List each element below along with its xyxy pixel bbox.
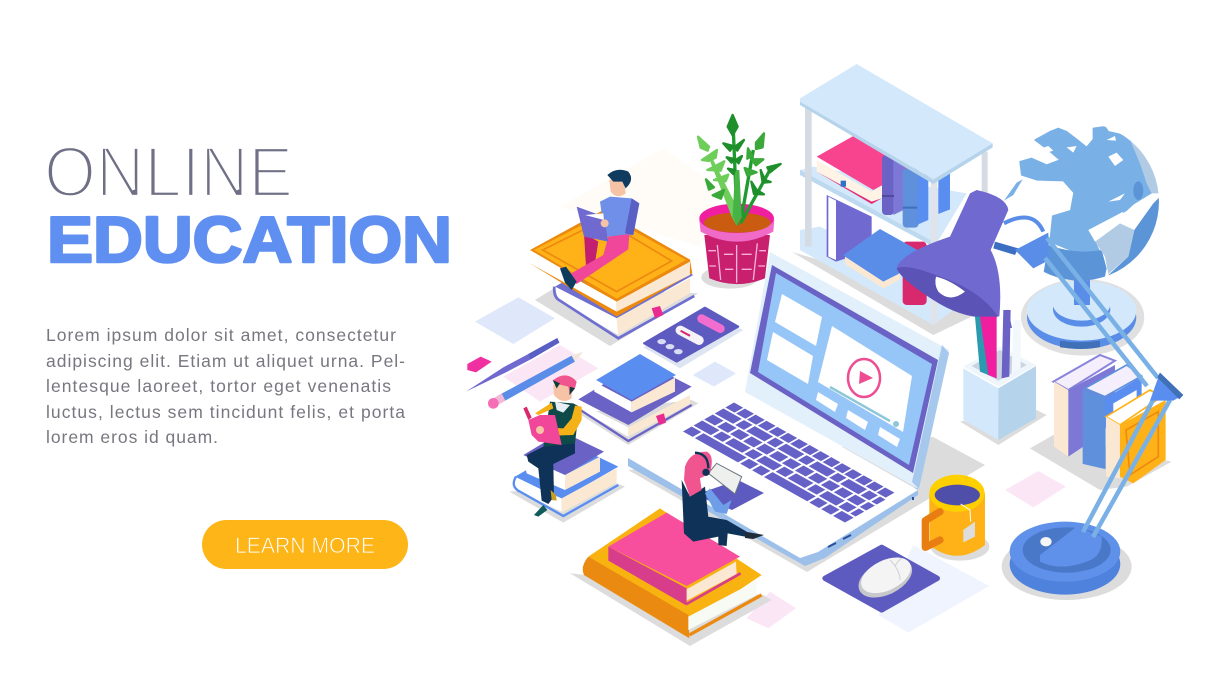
body text: adipiscing elit. Etiam ut aliquet urna. Pel- — [46, 351, 405, 371]
lamp hinge — [993, 217, 1049, 268]
pink book — [608, 513, 741, 606]
blue book — [1083, 365, 1142, 468]
body text: lorem eros id quam. — [46, 427, 218, 447]
vest — [543, 402, 579, 447]
desk lamp shade — [897, 190, 1049, 318]
laptop — [628, 252, 985, 572]
desk lamp arms — [1045, 238, 1170, 537]
stems — [733, 130, 770, 225]
shoes — [534, 505, 547, 517]
head — [553, 383, 572, 401]
keypad dots — [657, 339, 683, 354]
mouse — [852, 550, 918, 606]
hair — [684, 452, 712, 497]
mug — [925, 475, 989, 561]
handle — [925, 512, 940, 547]
heading: EDUCATION: EDUCATION — [47, 203, 452, 276]
legs — [527, 442, 575, 504]
ports — [828, 497, 913, 547]
eraser — [467, 357, 492, 372]
pens — [975, 310, 1021, 378]
screen windows — [767, 294, 912, 447]
laptop shadow — [628, 437, 985, 572]
touchpad — [695, 480, 764, 510]
book — [528, 415, 562, 445]
upper blue book — [594, 354, 676, 412]
open book — [708, 463, 742, 494]
desk lamp base — [1002, 522, 1132, 600]
headphones — [695, 453, 708, 468]
book stack under man — [530, 210, 698, 346]
globe base — [1021, 277, 1144, 356]
pot — [704, 235, 770, 284]
globe sphere — [1004, 126, 1159, 280]
pencil — [488, 352, 583, 409]
body text: lentesque laoreet, tortor eget venenatis — [46, 376, 391, 396]
pencil holder — [960, 310, 1047, 445]
body text: Lorem ipsum dolor sit amet, consectetur — [46, 325, 396, 345]
play button — [848, 359, 880, 397]
lower purple book — [578, 361, 692, 441]
lower blue book — [514, 444, 618, 516]
laptop lid — [745, 252, 949, 489]
mouse pad and mouse — [825, 547, 937, 610]
girl body — [682, 480, 747, 546]
pencil tips — [1003, 309, 1012, 328]
desk lamp joint — [1150, 373, 1183, 401]
hand — [536, 426, 544, 434]
book stack small — [509, 432, 625, 523]
floor decorations — [475, 148, 1066, 633]
phone calculator — [643, 308, 743, 368]
body text: luctus, lectus sem tincidunt felis, et porta — [46, 402, 405, 422]
upper yellow book — [530, 210, 692, 317]
upright books — [1030, 355, 1172, 490]
orange book — [583, 508, 762, 638]
girl reading with headphones — [570, 452, 772, 646]
yellow book — [1106, 390, 1166, 483]
pen — [466, 338, 559, 392]
lower shelf books — [827, 195, 927, 305]
lower book — [554, 243, 694, 338]
shirt — [600, 197, 639, 237]
body text — [46, 325, 405, 447]
hand — [601, 219, 609, 227]
big book stack — [570, 508, 772, 646]
laptop base — [628, 458, 918, 566]
upright books on shelf — [882, 155, 950, 228]
shoe — [560, 267, 577, 290]
head — [609, 175, 626, 196]
sleeves — [535, 403, 553, 415]
open book — [577, 207, 608, 242]
button: learn more: LEARN MORE — [235, 533, 375, 558]
progress bar — [830, 387, 890, 421]
infographic canvas — [46, 64, 1184, 646]
purple book — [1053, 355, 1115, 457]
keyboard — [687, 405, 892, 520]
pot plant — [698, 115, 781, 289]
shoe — [745, 532, 764, 539]
heading: ONLINE: ONLINE — [44, 134, 293, 212]
isometric illustration — [466, 64, 1183, 646]
globe — [1001, 123, 1163, 356]
tea tag — [961, 504, 971, 522]
person reading pink book — [523, 375, 582, 517]
man reading — [560, 170, 639, 290]
far leg — [584, 233, 598, 273]
button: learn more — [202, 520, 408, 569]
book stack middle — [578, 354, 698, 445]
leaves — [723, 115, 781, 194]
sleeve — [705, 488, 732, 514]
title — [44, 134, 452, 276]
white pill — [674, 324, 705, 347]
book on shelf: pink — [817, 136, 910, 204]
upper purple book — [523, 432, 604, 490]
bookshelf — [792, 64, 993, 335]
pink display — [696, 313, 726, 335]
near leg — [568, 234, 629, 284]
